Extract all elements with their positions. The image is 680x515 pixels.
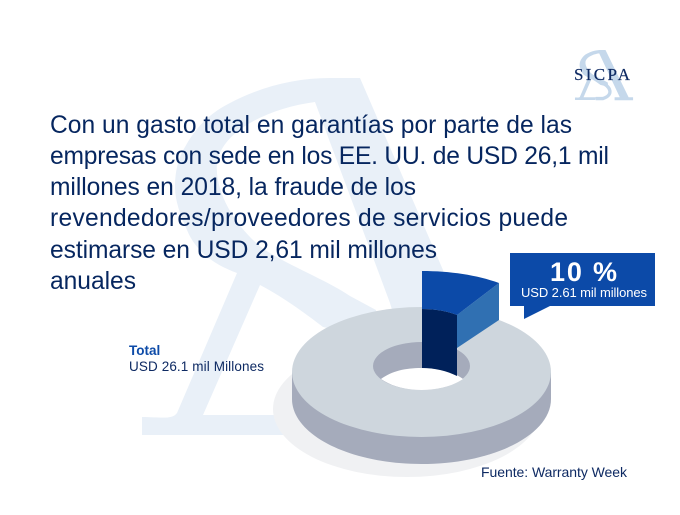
hole opening [381, 368, 463, 390]
slice top [422, 271, 499, 315]
slice side face [457, 283, 499, 348]
donut top [292, 307, 551, 437]
source: Fuente: Warranty Week [481, 464, 628, 480]
callout [510, 253, 655, 319]
headline: revendedores/proveedores de servicios puede [50, 205, 568, 232]
callout: 10 % [550, 257, 617, 287]
headline [50, 112, 609, 295]
logo mark [575, 50, 633, 100]
label: total [129, 343, 264, 374]
watermark monogram [142, 78, 455, 435]
callout: USD 2.61 mil millones [521, 285, 648, 300]
donut chart [273, 271, 551, 477]
headline: empresas con sede en los EE. UU. de USD 26,1 mil [50, 143, 609, 170]
headline: estimarse en USD 2,61 mil millones [50, 237, 437, 264]
headline: Con un gasto total en garantías por parte de las [50, 112, 572, 139]
label: total: Total [129, 343, 160, 358]
slice inner face [422, 309, 457, 376]
headline: millones en 2018, la fraude de los [50, 174, 416, 201]
logo: SICPA [574, 50, 633, 100]
donut hole [373, 342, 470, 390]
donut side [292, 372, 551, 464]
donut shadow [273, 341, 541, 477]
logo wordmark: SICPA [574, 65, 631, 84]
headline: anuales [50, 268, 136, 295]
label: total: USD 26.1 mil Millones [129, 359, 264, 374]
